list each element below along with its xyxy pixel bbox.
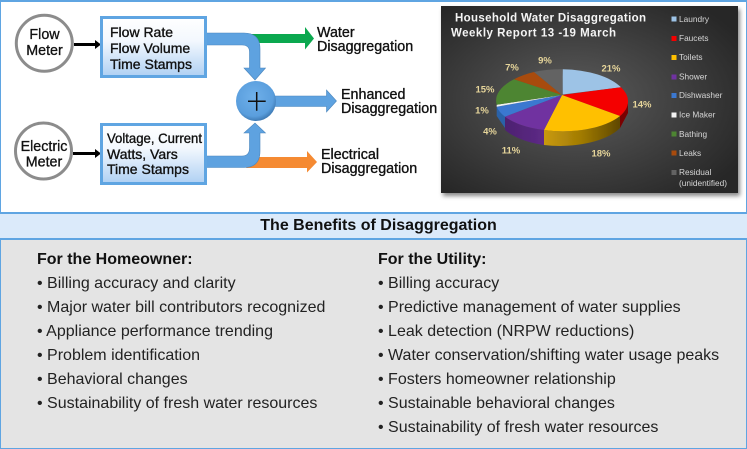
label: electrical disaggregation: [321, 147, 417, 177]
label: enhanced disaggregation: Enhanced: [341, 87, 405, 103]
box: electric data: Time Stamps: [107, 161, 189, 177]
label: water disaggregation: Water: [317, 25, 355, 41]
percentage labels: 15%: [475, 84, 495, 96]
column: for the utility: • Predictive management of water supplies: [378, 299, 681, 316]
chart legend: [672, 14, 727, 188]
column: for the utility: For the Utility:: [378, 251, 486, 268]
column: for the homeowner: • Problem identification: [37, 347, 200, 364]
chart legend: Faucets: [679, 33, 709, 43]
percentage labels: 18%: [591, 148, 611, 160]
chart legend: Bathing: [679, 129, 708, 139]
percentage labels: 9%: [538, 56, 552, 66]
column: for the homeowner: • Appliance performance trending: [37, 323, 273, 340]
icon: flow meter circle: Meter: [26, 43, 63, 59]
column: for the utility: • Sustainable behavioral changes: [378, 395, 615, 412]
chart legend: Dishwasher: [679, 90, 723, 100]
icon: electric meter circle: [16, 123, 72, 179]
arrow: top pipe to sum: [205, 33, 266, 80]
heading: benefits band: [0, 214, 747, 238]
chart title: Household Water Disaggregation: [455, 12, 646, 24]
chart title: [451, 12, 646, 40]
column: for the homeowner: [37, 251, 325, 412]
label: electrical disaggregation: Electrical: [321, 147, 379, 163]
column: for the homeowner: • Sustainability of fresh water resources: [37, 395, 317, 412]
chart legend: Leaks: [679, 148, 701, 158]
box: flow data: [102, 18, 206, 76]
arrow: enhanced disaggregation: [272, 90, 336, 112]
column: for the utility: • Billing accuracy: [378, 275, 499, 292]
heading: benefits band: The Benefits of Disaggregation: [260, 217, 497, 234]
icon: flow meter circle: [16, 15, 72, 71]
box: flow data: Time Stamps: [110, 56, 192, 72]
percentage labels: 14%: [632, 100, 652, 110]
column: for the homeowner: • Behavioral changes: [37, 371, 188, 388]
arrow: water disaggregation green: [245, 27, 314, 50]
box: flow data: Flow Volume: [110, 40, 190, 56]
icon: sum circle: [236, 81, 276, 121]
label: enhanced disaggregation: [341, 87, 437, 117]
pie slices top: [496, 69, 628, 131]
icon: flow meter circle: Flow: [29, 27, 60, 43]
percentage labels: 4%: [483, 126, 497, 138]
label: electrical disaggregation: Disaggregation: [321, 161, 417, 177]
percentage labels: 7%: [505, 62, 519, 74]
column: for the homeowner: • Major water bill contributors recognized: [37, 299, 325, 316]
chart legend: Ice Maker: [679, 110, 716, 120]
chart legend: Toilets: [679, 52, 703, 62]
box: electric data: Watts, Vars: [107, 146, 178, 162]
box: electric data: Voltage, Current: [107, 130, 202, 146]
box: flow data: Flow Rate: [110, 24, 173, 40]
column: for the utility: • Fosters homeowner relationship: [378, 371, 616, 388]
panel: benefits: [0, 238, 747, 449]
chart legend: Shower: [679, 72, 707, 82]
chart: household water pie: [441, 6, 740, 196]
chart title: Weekly Report 13 -19 March: [451, 28, 616, 40]
arrow: bottom pipe to sum: [205, 123, 266, 168]
arrow: electrical disaggregation orange: [246, 151, 317, 172]
icon: electric meter circle: Electric: [21, 139, 67, 155]
column: for the utility: • Leak detection (NRPW reductions): [378, 323, 634, 340]
arrow: flow meter to box: [74, 40, 101, 49]
label: enhanced disaggregation: Disaggregation: [341, 101, 437, 117]
percentage labels: [475, 56, 652, 160]
panel: data flow and pie chart: [0, 0, 747, 214]
column: for the utility: • Water conservation/shifting water usage peaks: [378, 347, 719, 364]
percentage labels: 1%: [475, 106, 489, 116]
chart legend: (unidentified): [679, 178, 727, 188]
column: for the homeowner: • Billing accuracy and clarity: [37, 275, 236, 292]
arrow: electric meter to box: [73, 149, 101, 158]
percentage labels: 21%: [601, 64, 621, 74]
icon: electric meter circle: Meter: [26, 154, 63, 170]
label: water disaggregation: Disaggregation: [317, 39, 413, 55]
box: electric data: [102, 124, 206, 184]
chart legend: Residual: [679, 167, 711, 177]
column: for the homeowner: For the Homeowner:: [37, 251, 193, 268]
label: water disaggregation: [317, 25, 413, 55]
percentage labels: 11%: [502, 146, 521, 156]
pie slice sides: [497, 100, 628, 146]
column: for the utility: [378, 251, 719, 436]
column: for the utility: • Sustainability of fresh water resources: [378, 419, 658, 436]
chart legend: Laundry: [679, 14, 710, 24]
